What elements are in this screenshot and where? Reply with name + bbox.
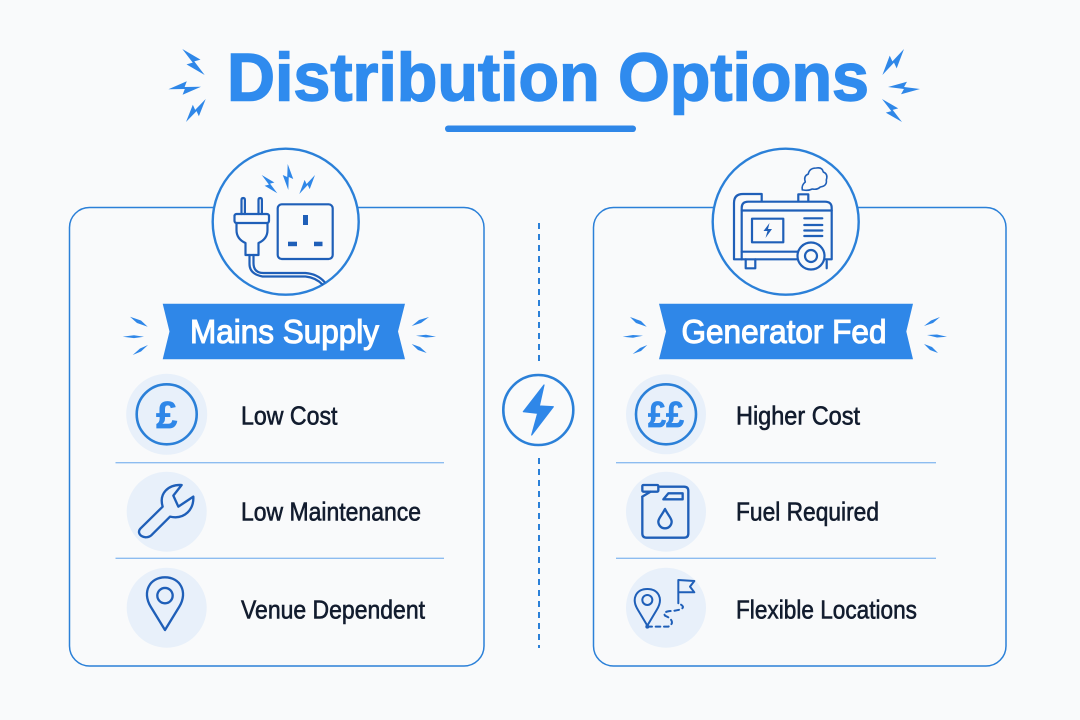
icon: title lightning bolts left (168, 45, 210, 126)
title: Distribution Options (227, 40, 869, 116)
ribbon sparks (123, 317, 436, 355)
icon: central lightning (503, 375, 573, 445)
central dashed divider (538, 223, 540, 648)
row: low maintenance (127, 472, 421, 552)
ribbon heading (659, 304, 913, 359)
panel: mains supply (70, 149, 484, 666)
title underline (445, 126, 636, 132)
row: flexible locations: Flexible Locations (736, 594, 917, 624)
ribbon sparks (623, 317, 947, 354)
row: higher cost (626, 374, 861, 454)
row: fuel required (626, 472, 879, 552)
row: higher cost: ££ (648, 394, 684, 435)
row: flexible locations (626, 568, 917, 648)
row: fuel required: Fuel Required (736, 496, 879, 526)
row: venue dependent (127, 568, 426, 648)
row: low cost: Low Cost (241, 400, 338, 430)
ribbon heading: Mains Supply (190, 313, 379, 350)
panel: generator fed (594, 149, 1006, 666)
ribbon heading (163, 304, 405, 359)
row: low cost: £ (156, 395, 177, 437)
icon: plug and socket (213, 149, 359, 295)
row: low cost (126, 374, 338, 455)
card outline (70, 208, 484, 666)
row: venue dependent: Venue Dependent (241, 594, 426, 624)
icon: title lightning bolts right (877, 45, 920, 126)
card outline (594, 208, 1006, 666)
ribbon heading: Generator Fed (682, 313, 886, 350)
row: higher cost: Higher Cost (736, 400, 861, 430)
row: low maintenance: Low Maintenance (241, 496, 421, 526)
icon: generator (713, 149, 859, 295)
